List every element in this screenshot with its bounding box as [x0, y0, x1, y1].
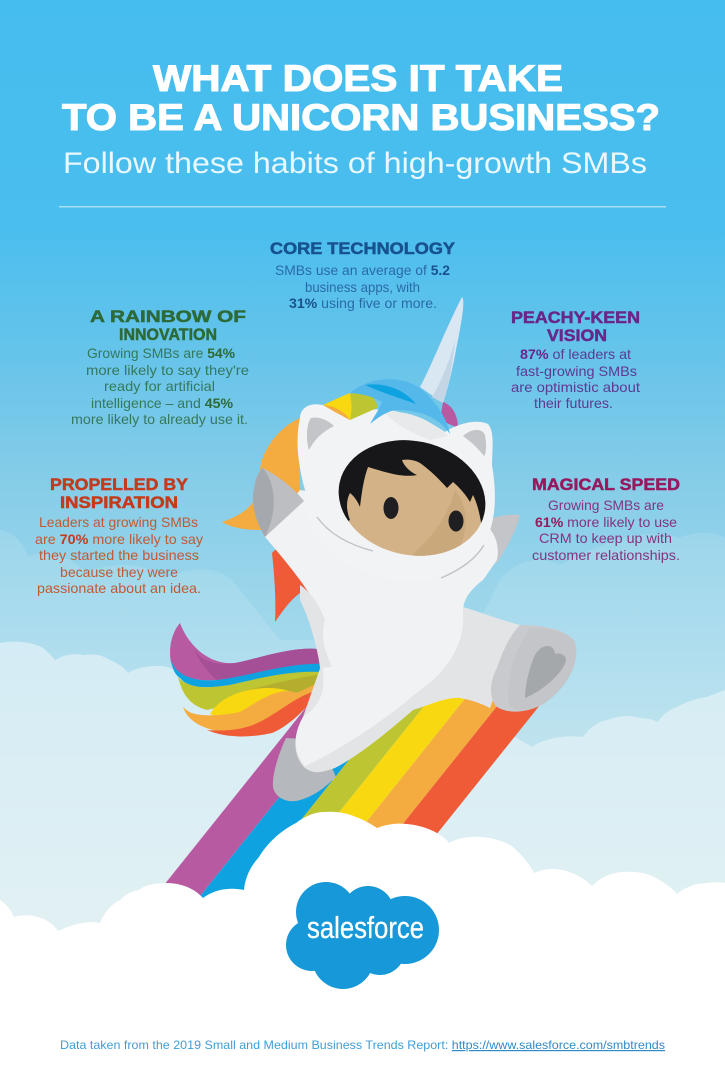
heading: propelled by inspiration: INSPIRATION — [60, 493, 178, 512]
heading: magical speed: MAGICAL SPEED — [532, 475, 680, 494]
ears — [307, 417, 486, 456]
horn — [420, 297, 463, 403]
heading: propelled by inspiration — [50, 475, 189, 512]
white foreground cloud — [0, 812, 725, 1077]
body: core technology: business apps, with — [305, 279, 420, 295]
body: a rainbow of innovation: more likely to already use it. — [71, 411, 248, 427]
heading: a rainbow of innovation: A RAINBOW OF — [90, 307, 246, 326]
legs and body — [295, 606, 520, 772]
logo cloud — [286, 882, 439, 989]
distant clouds — [0, 530, 725, 1000]
subtitle: Follow these habits of high-growth SMBs — [63, 147, 647, 180]
pale foreground clouds — [0, 642, 725, 1000]
body: peachy-keen vision: 87% of leaders at — [520, 346, 631, 362]
panel: peachy-keen vision — [511, 308, 640, 411]
body: propelled by inspiration: Leaders at growing SMBs — [39, 514, 198, 530]
left leg hoof — [273, 738, 336, 801]
left arm hoof — [253, 468, 304, 537]
body: core technology: 31% using five or more. — [289, 295, 437, 311]
body: core technology — [275, 262, 450, 311]
panel: a rainbow of innovation — [71, 307, 249, 427]
body: a rainbow of innovation: Growing SMBs are 54% — [87, 345, 236, 361]
panel: propelled by inspiration — [35, 475, 203, 596]
body: propelled by inspiration: because they were — [60, 564, 178, 580]
right foot with heart — [491, 625, 576, 712]
heading: core technology: CORE TECHNOLOGY — [270, 239, 456, 258]
title: WHAT DOES IT TAKE — [153, 58, 563, 99]
body: a rainbow of innovation — [71, 345, 249, 427]
body: peachy-keen vision — [511, 346, 640, 411]
panel: magical speed — [532, 475, 680, 563]
body: propelled by inspiration: they started the business — [39, 547, 199, 563]
body: magical speed: Growing SMBs are — [548, 497, 664, 513]
face — [338, 440, 486, 556]
hood — [298, 404, 495, 582]
heading: peachy-keen vision: VISION — [547, 326, 607, 345]
body: magical speed: customer relationships. — [532, 547, 680, 563]
body: a rainbow of innovation: intelligence – and 45% — [91, 395, 234, 411]
body: peachy-keen vision: are optimistic about — [511, 379, 640, 395]
back mane — [222, 402, 458, 622]
heading: peachy-keen vision — [511, 308, 640, 345]
body: peachy-keen vision: their futures. — [534, 395, 613, 411]
panel: core technology — [270, 239, 456, 311]
heading: a rainbow of innovation — [90, 307, 246, 344]
body: a rainbow of innovation: ready for artificial — [104, 378, 215, 394]
footer source note: Data taken from the 2019 Small and Medium Business Trends Report: https://www.salesforce.com/smbtrends — [60, 1038, 665, 1052]
body: propelled by inspiration: passionate about an idea. — [37, 580, 201, 596]
heading: propelled by inspiration: PROPELLED BY — [50, 475, 189, 494]
salesforce logo — [286, 882, 439, 989]
body: a rainbow of innovation: more likely to say they're — [86, 362, 249, 378]
unicorn — [222, 297, 576, 801]
body: propelled by inspiration — [35, 514, 203, 596]
right arm hoof — [480, 515, 520, 563]
rainbow trail — [152, 690, 552, 900]
eyes — [384, 497, 398, 519]
heading: peachy-keen vision: PEACHY-KEEN — [511, 308, 640, 327]
hair — [338, 440, 486, 523]
heading: a rainbow of innovation: INNOVATION — [119, 325, 217, 344]
title: TO BE A UNICORN BUSINESS? — [62, 97, 660, 138]
hood folds — [317, 517, 484, 578]
unicorn tail — [170, 623, 324, 736]
body: magical speed — [532, 497, 680, 563]
divider — [59, 206, 666, 208]
body: magical speed: CRM to keep up with — [539, 530, 672, 546]
body: core technology: SMBs use an average of 5.2 — [275, 262, 450, 278]
logo wordmark: salesforce — [307, 910, 424, 945]
top mane — [323, 379, 450, 434]
body: magical speed: 61% more likely to use — [535, 514, 677, 530]
body: propelled by inspiration: are 70% more likely to say — [35, 531, 203, 547]
title — [62, 58, 660, 138]
body: peachy-keen vision: fast-growing SMBs — [516, 363, 637, 379]
